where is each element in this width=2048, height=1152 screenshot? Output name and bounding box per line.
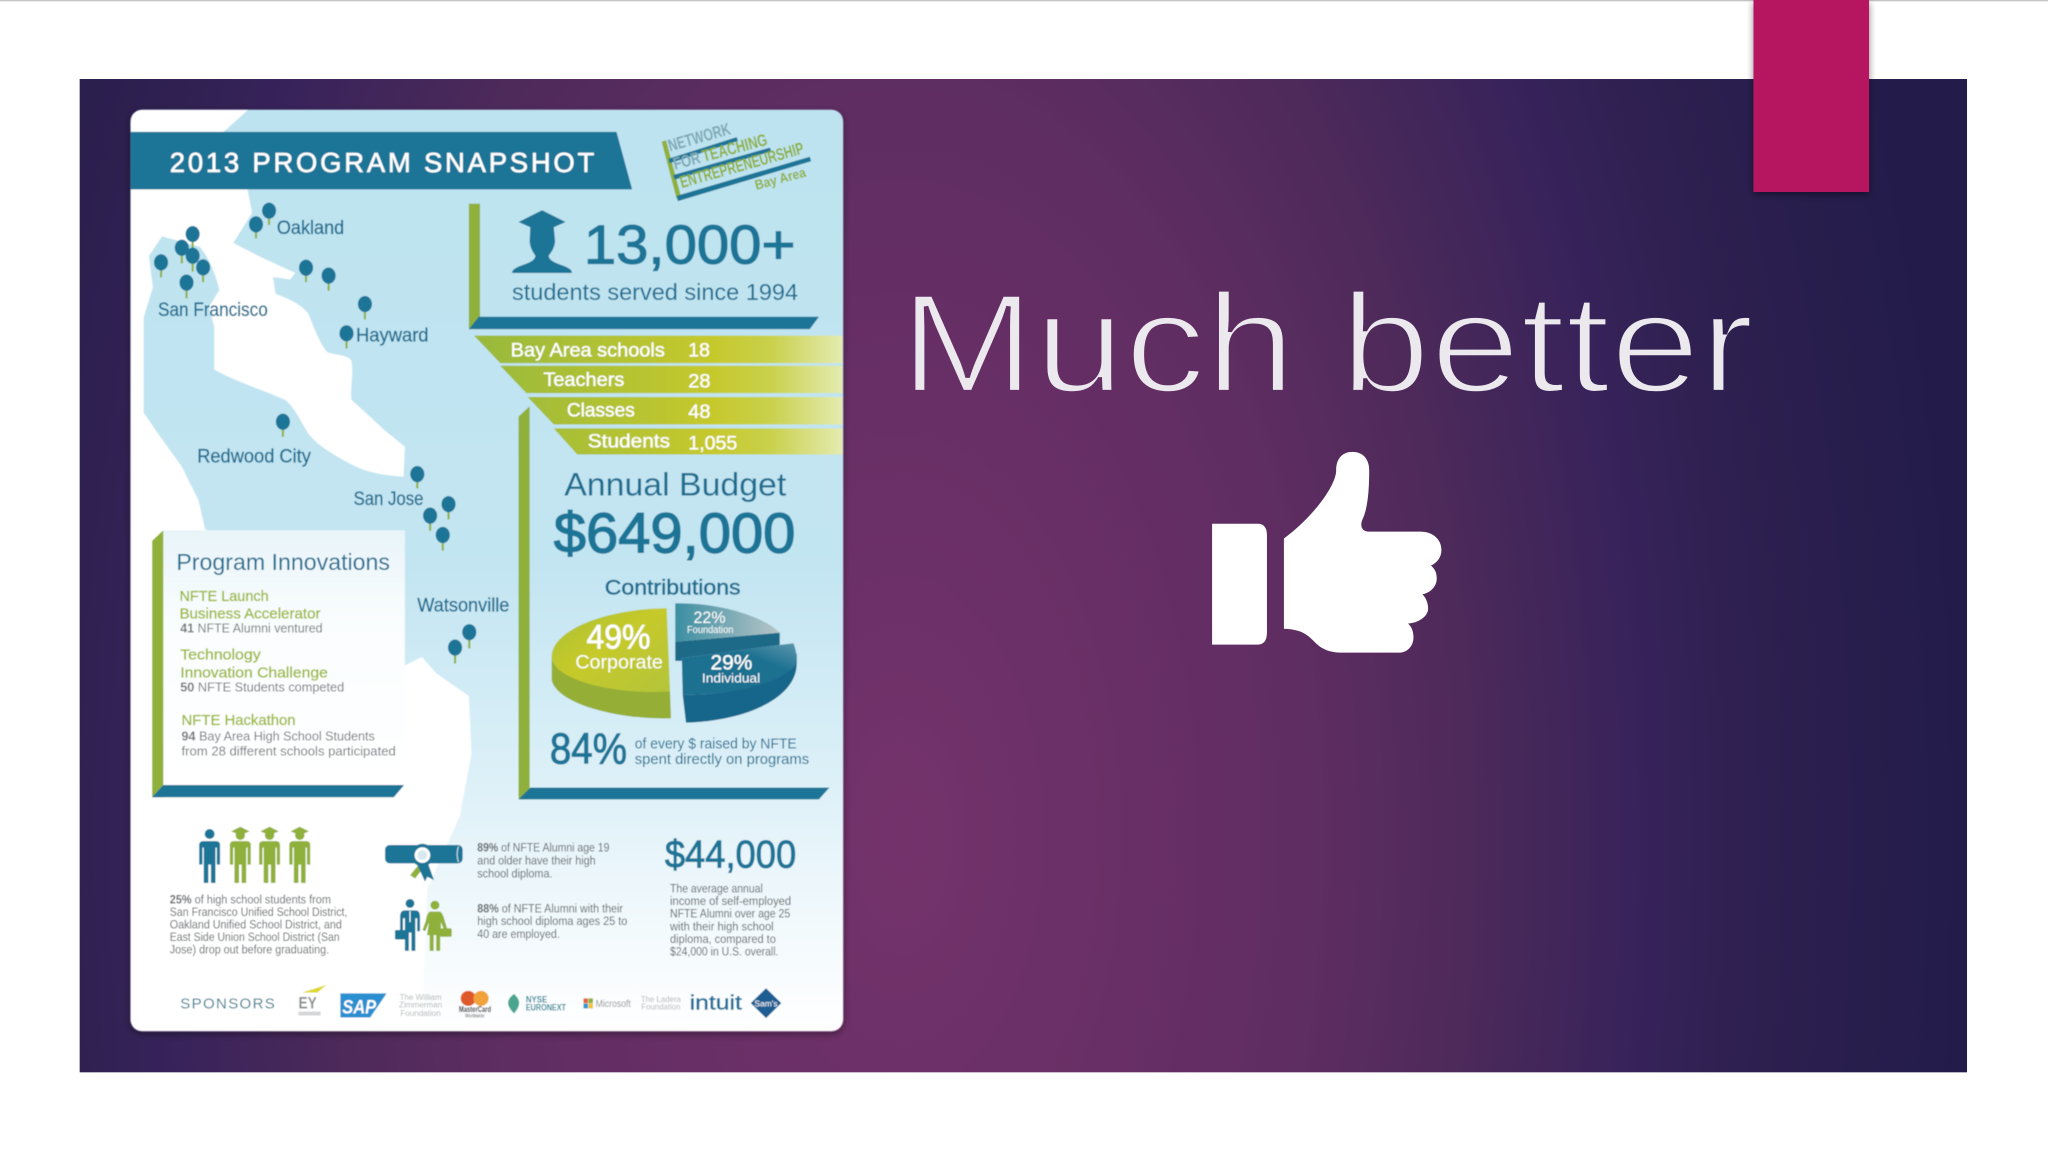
icon: thumbs up	[1212, 452, 1441, 653]
logo: Network for Teaching Entrepreneurship: ENTREPRENEURSHIP	[678, 139, 806, 192]
pie chart: contributions: Corporate	[575, 651, 663, 673]
stat ribbons: schools, teachers, classes, students	[474, 336, 842, 455]
stat: $44,000 income: $44,000	[665, 833, 796, 876]
text: dropout statistic: San Francisco Unified School District,	[170, 905, 347, 919]
panel: program innovations: 94 Bay Area High School Students	[182, 729, 375, 744]
pie chart: contributions: Individual	[702, 670, 760, 685]
sponsors row	[180, 985, 781, 1019]
panel: program innovations: NFTE Launch	[179, 588, 269, 605]
logo: EY: EY	[298, 993, 317, 1012]
text: dropout statistic: East Side Union School District (San	[170, 930, 340, 944]
panel: program innovations: from 28 different schools participated	[182, 743, 396, 758]
text: dropout statistic	[170, 892, 347, 956]
logo: Sam's: Sam's	[754, 998, 778, 1008]
logo: Network for Teaching Entrepreneurship: FOR	[671, 148, 703, 174]
icon: employed couple	[395, 899, 452, 951]
stat: $44,000 income: NFTE Alumni over age 25	[670, 907, 790, 921]
map city labels	[158, 218, 509, 617]
panel: program innovations: Technology	[180, 647, 261, 664]
title banner	[131, 132, 632, 189]
logo: MasterCard: Worldwide	[465, 1013, 485, 1019]
logo: NYSE Euronext: NYSE	[526, 994, 547, 1004]
logo: Network for Teaching Entrepreneurship	[662, 119, 811, 201]
stat ribbons: schools, teachers, classes, students: Classes	[567, 401, 635, 422]
logo: SAP: SAP	[342, 997, 377, 1019]
pink accent tab	[1753, 0, 1869, 192]
icon: four students	[199, 827, 310, 883]
map city labels: Hayward	[356, 326, 429, 347]
logo: EY	[298, 985, 327, 1016]
map pins	[154, 203, 476, 664]
panel: program innovations: Business Accelerator	[179, 605, 321, 622]
top hairline	[0, 0, 2048, 1]
logo: Network for Teaching Entrepreneurship: NETWORK	[666, 119, 733, 155]
logo: Zimmerman Foundation: Foundation	[400, 1009, 441, 1018]
panel: program innovations: Innovation Challenge	[180, 664, 328, 681]
budget panel: Contributions	[605, 574, 741, 599]
text: employment statistic	[477, 901, 627, 941]
callout: 84%	[550, 725, 809, 773]
callout: 84%: spent directly on programs	[635, 751, 809, 768]
map city labels: Oakland	[277, 218, 344, 239]
budget panel	[519, 406, 829, 799]
stat ribbons: schools, teachers, classes, students: 1,055	[688, 433, 737, 454]
stat: $44,000 income: with their high school	[669, 919, 774, 933]
map city labels: San Francisco	[158, 300, 268, 321]
logo: Intuit: intuit	[690, 993, 742, 1015]
text: diploma statistic: and older have their high	[477, 853, 596, 867]
text: employment statistic: 40 are employed.	[477, 927, 560, 941]
pie chart: contributions: Foundation	[687, 625, 733, 636]
logo: Ladera Foundation: The Ladera	[641, 995, 682, 1004]
stat ribbons: schools, teachers, classes, students: Students	[588, 432, 670, 453]
stat ribbons: schools, teachers, classes, students: Teachers	[543, 370, 624, 391]
pie chart: contributions: 49%	[586, 618, 650, 656]
map city labels: Watsonville	[417, 596, 509, 617]
text: employment statistic: 88% of NFTE Alumni with their	[477, 901, 623, 915]
pie chart: contributions: 29%	[711, 651, 752, 674]
sponsors row: SPONSORS	[180, 995, 275, 1012]
purple background panel	[80, 79, 1967, 1072]
budget panel: $649,000	[554, 501, 795, 564]
icon: diploma	[385, 844, 463, 882]
logo: Zimmerman Foundation: Zimmerman	[399, 1001, 442, 1010]
logo: Zimmerman Foundation	[399, 993, 442, 1018]
budget panel: Annual Budget	[564, 466, 786, 503]
stat: $44,000 income: income of self-employed	[670, 894, 791, 908]
text: dropout statistic: Oakland Unified School District, and	[170, 918, 342, 932]
map city labels: Redwood City	[197, 446, 311, 467]
stat: $44,000 income: $24,000 in U.S. overall.	[670, 944, 778, 958]
map city labels: San Jose	[354, 489, 423, 510]
pie chart: contributions: 22%	[694, 608, 726, 627]
stat: $44,000 income	[665, 833, 796, 958]
icon: graduate silhouette	[512, 210, 572, 273]
stat ribbons: schools, teachers, classes, students: 48	[688, 402, 711, 423]
panel: program innovations: NFTE Hackathon	[182, 712, 296, 729]
title banner: 2013 PROGRAM SNAPSHOT	[170, 147, 595, 178]
logo: Ladera Foundation	[641, 995, 682, 1012]
stat ribbons: schools, teachers, classes, students: 18	[688, 341, 710, 362]
callout: 84%: of every $ raised by NFTE	[635, 735, 797, 752]
stat panel: 13,000+ students: 13,000+	[584, 213, 795, 275]
infographic card	[131, 110, 843, 1031]
logo: NYSE Euronext	[508, 994, 566, 1014]
stat panel: 13,000+ students	[469, 204, 819, 329]
logo: Ladera Foundation: Foundation	[641, 1003, 680, 1012]
text: diploma statistic: school diploma.	[477, 866, 552, 880]
logo: Zimmerman Foundation: The William	[399, 993, 442, 1002]
text: dropout statistic: 25% of high school students from	[170, 892, 331, 906]
map: white water shape	[131, 110, 472, 1031]
panel: program innovations	[152, 530, 405, 797]
stat ribbons: schools, teachers, classes, students: Bay Area schools	[511, 341, 665, 362]
logo: MasterCard	[459, 991, 491, 1019]
panel: program innovations: 50 NFTE Students competed	[180, 680, 344, 695]
panel: program innovations: Program Innovations	[176, 549, 390, 575]
logo: NYSE Euronext: EURONEXT	[526, 1002, 566, 1012]
stat ribbons: schools, teachers, classes, students: 28	[688, 371, 711, 392]
callout: 84%: 84%	[550, 725, 627, 773]
logo: MasterCard: MasterCard	[459, 1004, 491, 1014]
logo: Microsoft: Microsoft	[596, 999, 631, 1010]
text: employment statistic: high school diploma ages 25 to	[477, 914, 627, 928]
slide heading: Much better: Much better	[900, 264, 1754, 422]
text: diploma statistic	[477, 841, 610, 880]
text: diploma statistic: 89% of NFTE Alumni age 19	[477, 841, 610, 855]
logo: Microsoft	[583, 998, 631, 1010]
logo: Sam's	[751, 988, 781, 1018]
logo: Network for Teaching Entrepreneurship: Bay Area	[753, 165, 808, 193]
text: dropout statistic: Jose) drop out before graduating.	[170, 942, 329, 956]
stat panel: 13,000+ students: students served since 1994	[512, 279, 798, 305]
stat: $44,000 income: diploma, compared to	[670, 932, 776, 946]
logo: Network for Teaching Entrepreneurship: TEACHING	[700, 130, 769, 166]
panel: program innovations: 41 NFTE Alumni ventured	[180, 621, 323, 636]
pie chart: contributions	[552, 603, 797, 723]
stat: $44,000 income: The average annual	[670, 881, 763, 895]
